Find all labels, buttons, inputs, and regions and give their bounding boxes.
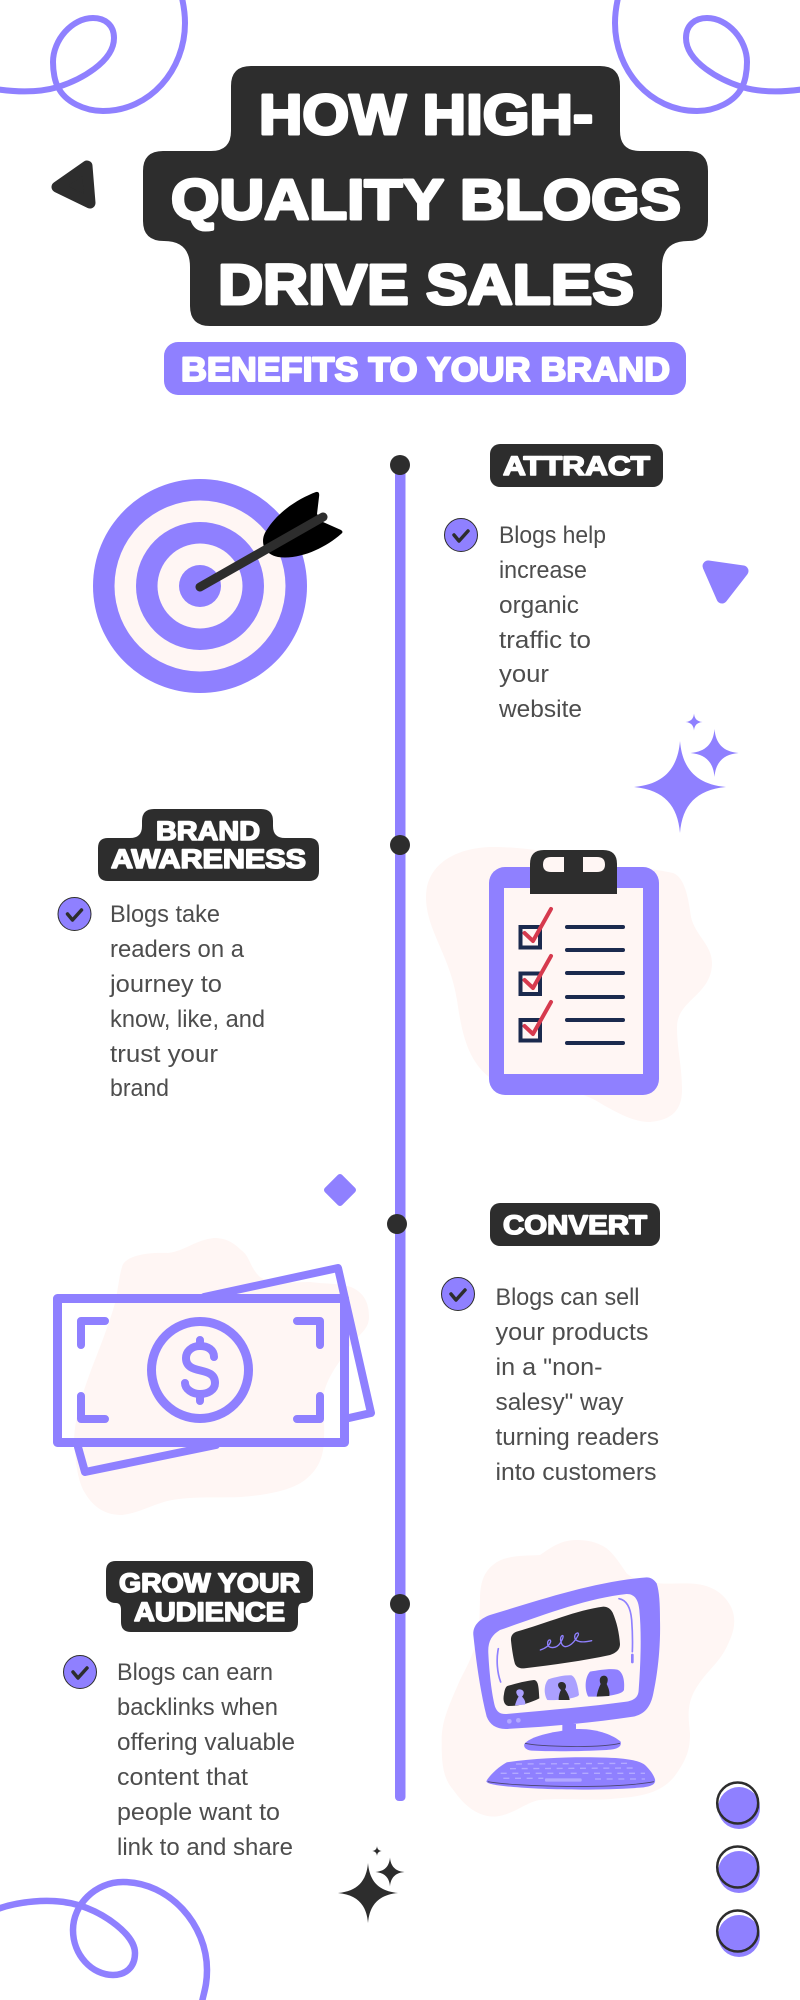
panel: brand awareness: BRAND [156, 816, 260, 846]
panel: attract: ATTRACT [503, 451, 651, 481]
title: QUALITY BLOGS [171, 168, 681, 232]
panel: brand awareness: Blogs take [110, 901, 220, 928]
icon: three outlined dots [717, 1782, 760, 1957]
icon: purple diamond [327, 1177, 353, 1203]
panel: brand awareness [58, 809, 319, 1102]
title: HOW HIGH- [259, 83, 593, 147]
panel: grow your audience: content that [117, 1764, 248, 1791]
panel: convert: salesy" way [496, 1389, 624, 1416]
panel: grow your audience: backlinks when [117, 1694, 278, 1721]
panel: convert [442, 1203, 660, 1486]
panel: grow your audience: people want to [117, 1799, 280, 1826]
icon: dark triangle [57, 166, 90, 203]
icon: computer with video call [442, 1540, 734, 1817]
panel: brand awareness: AWARENESS [111, 844, 306, 874]
panel: convert: CONVERT [503, 1210, 648, 1240]
panel: attract: website [498, 696, 582, 723]
subtitle pill [164, 342, 686, 395]
icon: money bills [58, 1238, 371, 1515]
panel: convert: Blogs can sell [496, 1284, 640, 1311]
panel: attract: organic [499, 592, 579, 619]
icon: purple sparkles [634, 714, 738, 833]
panel: attract: increase [499, 557, 587, 584]
panel: grow your audience: GROW YOUR [119, 1568, 300, 1598]
subtitle pill: BENEFITS TO YOUR BRAND [181, 351, 670, 389]
title: DRIVE SALES [218, 253, 634, 317]
panel: attract: traffic to [499, 627, 591, 654]
panel: brand awareness: brand [110, 1075, 169, 1102]
panel: attract: Blogs help [499, 522, 606, 549]
panel: brand awareness: know, like, and [110, 1006, 265, 1033]
swirl: bottom left [0, 1882, 207, 2000]
title [143, 66, 708, 326]
panel: grow your audience: AUDIENCE [134, 1597, 285, 1627]
panel: convert: in a "non- [496, 1354, 602, 1381]
panel: grow your audience: Blogs can earn [117, 1659, 273, 1686]
panel: grow your audience: offering valuable [117, 1729, 295, 1756]
panel: grow your audience: link to and share [117, 1834, 293, 1861]
icon: dark sparkles [338, 1846, 404, 1923]
panel: convert: turning readers [496, 1424, 659, 1451]
panel: convert: your products [496, 1319, 648, 1346]
panel: attract [444, 444, 663, 723]
panel: brand awareness: trust your [110, 1041, 218, 1068]
panel: convert: into customers [496, 1459, 656, 1486]
icon: clipboard checklist [426, 847, 712, 1122]
swirl: top left [0, 0, 185, 111]
timeline [387, 455, 410, 1801]
panel: brand awareness: readers on a [110, 936, 244, 963]
panel: grow your audience [64, 1561, 313, 1861]
panel: brand awareness: journey to [109, 971, 222, 998]
icon: target with dart [93, 479, 342, 693]
icon: purple triangle [708, 566, 743, 598]
swirl: top right [615, 0, 800, 111]
panel: attract: your [499, 661, 549, 688]
